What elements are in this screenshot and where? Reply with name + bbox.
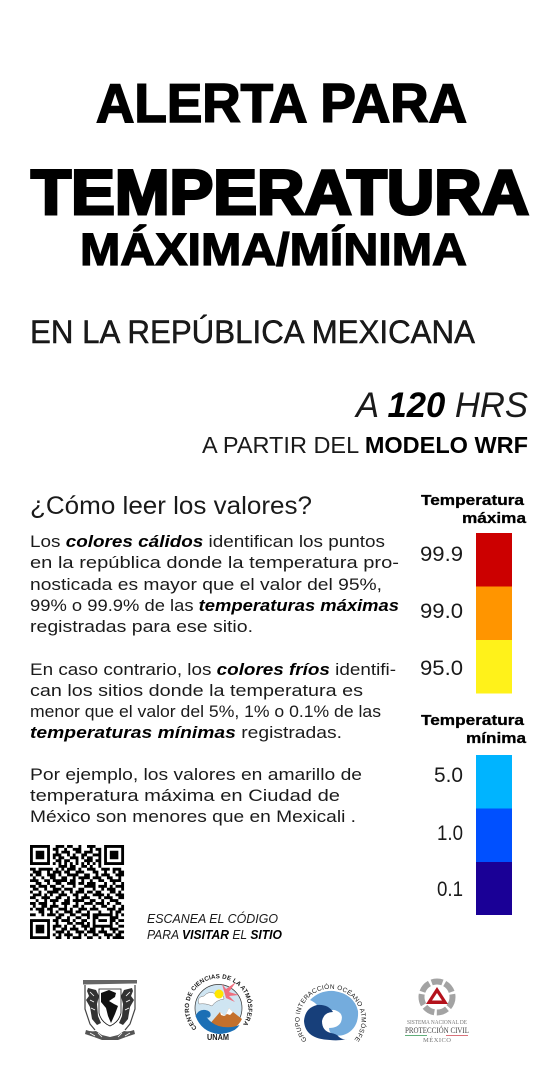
QR code (30, 846, 124, 938)
paragraph: cold colours: menor que el valor del 5%, 1% o 0.1% de las (30, 702, 381, 721)
logo: Centro de Ciencias de la Atmósfera: CENTRO DE CIENCIAS DE LA ATMÓSFERA (184, 974, 253, 1030)
paragraph: cold colours: temperaturas mínimas registradas. (30, 723, 342, 742)
paragraph: warm colours: nosticada es mayor que el valor del 95%, (30, 575, 382, 594)
paragraph: warm colours: en la república donde la temperatura pro- (30, 553, 399, 572)
subtitle: república mexicana: EN LA REPÚBLICA MEXICANA (30, 314, 476, 350)
legend: temperatura mínima (421, 712, 527, 915)
legend: temperatura máxima: 99.0 (420, 600, 463, 623)
paragraph: cold colours: can los sitios donde la temperatura es (30, 681, 363, 700)
legend: temperatura máxima: máxima (462, 510, 527, 527)
legend: temperatura mínima: Temperatura (421, 712, 525, 729)
logo: Centro de Ciencias de la Atmósfera: UNAM (207, 1033, 229, 1042)
legend: temperatura máxima: 99.9 (420, 543, 463, 566)
legend: temperatura máxima (420, 492, 527, 694)
paragraph: cold colours (30, 660, 396, 742)
paragraph: example: México son menores que en Mexicali . (30, 807, 356, 826)
title: alerta para: ALERTA PARA (96, 72, 467, 134)
QR caption (147, 911, 282, 942)
QR caption: PARA VISITAR EL SITIO (147, 928, 282, 942)
paragraph: warm colours: Los colores cálidos identifican los puntos (30, 532, 385, 551)
forecast horizon: 120 hrs: A 120 HRS (354, 386, 528, 425)
logo: Protección Civil: SISTEMA NACIONAL DE (407, 1020, 467, 1026)
legend: temperatura máxima: 95.0 (420, 657, 463, 680)
legend: temperatura mínima: 1.0 (437, 822, 463, 845)
logo: Grupo Interacción Océano Atmósfera (295, 983, 367, 1042)
legend: temperatura máxima: Temperatura (421, 492, 525, 509)
legend: temperatura mínima: 0.1 (437, 878, 463, 901)
paragraph: warm colours (30, 532, 399, 636)
paragraph: warm colours: registradas para ese sitio. (30, 617, 253, 636)
logo: Protección Civil: MÉXICO (423, 1036, 451, 1044)
title: temperatura: TEMPERATURA (31, 158, 529, 228)
paragraph: example: Por ejemplo, los valores en amarillo de (30, 765, 362, 784)
paragraph: cold colours: En caso contrario, los colores fríos identifi- (30, 660, 396, 679)
section heading: ¿Cómo leer los valores? (30, 492, 312, 520)
logo: Protección Civil: PROTECCIÓN CIVIL (405, 1025, 469, 1035)
logo: UNAM (83, 980, 137, 1040)
legend: temperatura mínima: mínima (466, 730, 527, 747)
model line: A PARTIR DEL MODELO WRF (202, 432, 528, 458)
logo: Grupo Interacción Océano Atmósfera: GRUPO INTERACCIÓN OCÉANO ATMÓSFERA (295, 983, 367, 1042)
paragraph: example (30, 765, 362, 826)
paragraph: example: temperatura máxima en Ciudad de (30, 786, 340, 805)
paragraph: warm colours: 99% o 99.9% de las temperaturas máximas (30, 596, 399, 615)
QR caption: ESCANEA EL CÓDIGO (147, 911, 278, 926)
title: máxima/mínima: MÁXIMA/MÍNIMA (80, 224, 467, 275)
legend: temperatura mínima: 5.0 (434, 764, 463, 787)
logo: Protección Civil (405, 982, 469, 1044)
